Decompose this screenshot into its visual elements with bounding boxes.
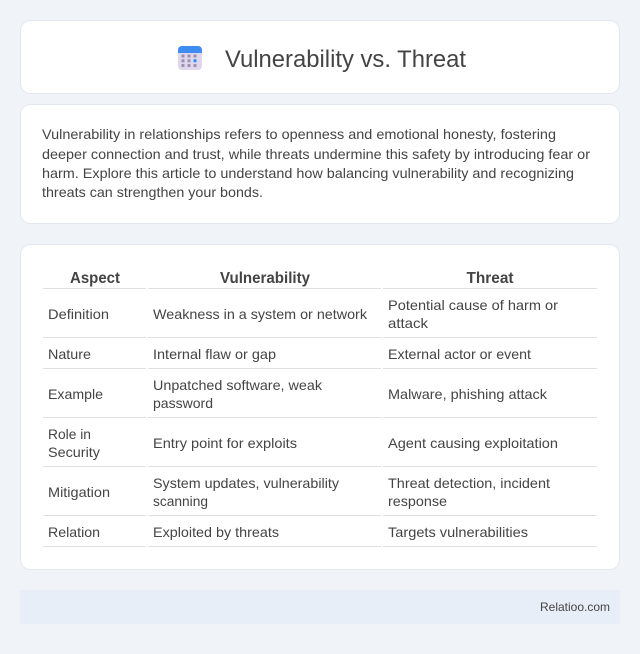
- row: mitigation: [48, 475, 550, 509]
- row: definition: Potential cause of harm or: [388, 297, 558, 313]
- row: mitigation: scanning: [153, 493, 208, 509]
- text block: introduction paragraph: [42, 126, 590, 200]
- footer bar: Relatioo.com: [540, 600, 610, 614]
- row: nature: Nature: [48, 346, 91, 362]
- row: relation: Exploited by threats: [153, 524, 279, 540]
- row: nature: Internal flaw or gap: [153, 346, 276, 362]
- row: mitigation: System updates, vulnerability: [153, 475, 339, 491]
- panel: comparison table: [20, 244, 620, 570]
- panel: introduction: [20, 104, 620, 224]
- title: Vulnerability vs. Threat: [225, 46, 466, 73]
- row: definition: [48, 297, 558, 331]
- table header: [70, 270, 514, 287]
- row: example: Unpatched software, weak: [153, 377, 323, 393]
- panel: title card: [20, 20, 620, 94]
- table header: Vulnerability: [220, 270, 310, 287]
- text block: introduction paragraph: deeper connection and trust, while threats undermine this safety by introducing fear or: [42, 146, 590, 162]
- row: definition: Definition: [48, 306, 109, 322]
- row: mitigation: Mitigation: [48, 484, 110, 500]
- row: mitigation: response: [388, 493, 447, 509]
- row: example: [48, 377, 548, 411]
- icon: calendar: [178, 46, 202, 70]
- row: definition: Weakness in a system or network: [153, 306, 368, 322]
- row: relation: [48, 524, 528, 540]
- row: relation: Targets vulnerabilities: [388, 524, 528, 540]
- row: nature: External actor or event: [388, 346, 531, 362]
- row: example: password: [153, 395, 213, 411]
- footer bar: [20, 590, 620, 624]
- table header: Aspect: [70, 270, 121, 287]
- text block: introduction paragraph: Vulnerability in relationships refers to openness and emotional honesty, fostering: [42, 126, 556, 142]
- table header: Threat: [466, 270, 514, 287]
- row: relation: Relation: [48, 524, 100, 540]
- row: example: Malware, phishing attack: [388, 386, 548, 402]
- row: role in security: Agent causing exploitation: [388, 435, 558, 451]
- row: nature: [48, 346, 531, 362]
- text block: introduction paragraph: threats can strengthen your bonds.: [42, 184, 263, 200]
- row: mitigation: Threat detection, incident: [388, 475, 550, 491]
- text block: introduction paragraph: harm. Explore this article to understand how balancing vulnerability and recognizing: [42, 165, 574, 181]
- row: example: Example: [48, 386, 103, 402]
- row: role in security: Role in: [48, 426, 91, 442]
- row: role in security: [48, 426, 558, 460]
- row: role in security: Entry point for exploits: [153, 435, 297, 451]
- row: definition: attack: [388, 315, 429, 331]
- row: role in security: Security: [48, 444, 100, 460]
